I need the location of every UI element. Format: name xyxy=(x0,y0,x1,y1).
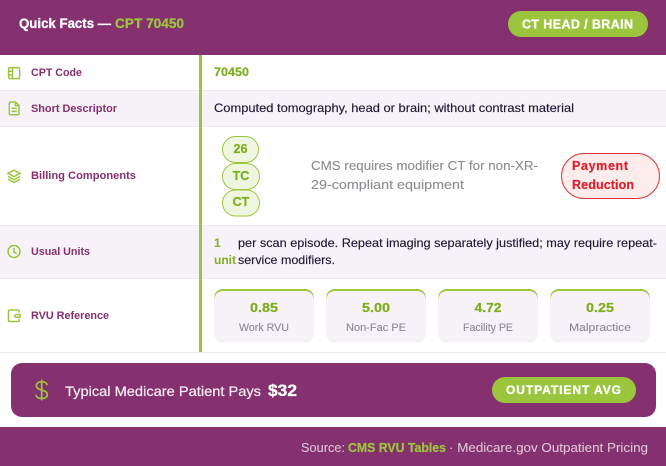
value: 70450: 70450 xyxy=(214,67,249,79)
header xyxy=(0,0,666,55)
icon: clock xyxy=(8,246,20,258)
row: short descriptor xyxy=(0,91,666,127)
banner: patient pays xyxy=(11,363,656,417)
source line: CMS RVU Tables xyxy=(348,441,446,455)
chip: TC xyxy=(222,164,260,190)
banner label: Typical Medicare Patient Pays xyxy=(65,383,261,399)
title: CPT 70450 xyxy=(115,15,184,31)
card: malpractice: 0.25 xyxy=(586,300,614,315)
label: RVU Reference: RVU Reference xyxy=(31,310,109,322)
value: 1 unit xyxy=(214,236,236,267)
label: Billing Components: Billing Components xyxy=(31,170,136,182)
title: Quick Facts — xyxy=(19,15,111,31)
chip: 26: 26 xyxy=(234,142,247,156)
badge: outpatient avg xyxy=(492,377,636,403)
badge: payment reduction: Reduction xyxy=(572,178,634,192)
row: CPT code xyxy=(0,55,666,91)
chip: CT: CT xyxy=(233,195,250,209)
modifier note: 29-compliant equipment xyxy=(311,178,465,192)
chip: TC: TC xyxy=(233,169,249,183)
card: work RVU xyxy=(214,289,314,342)
icon: code table xyxy=(9,68,20,79)
row: RVU reference xyxy=(0,279,666,353)
footer xyxy=(0,427,666,466)
value: 1 unit: unit xyxy=(214,253,236,267)
card: malpractice: Malpractice xyxy=(569,322,631,334)
card: work RVU: Work RVU xyxy=(239,322,289,334)
icon: document xyxy=(9,102,19,115)
row: billing components xyxy=(0,127,666,226)
card: non-facility PE xyxy=(326,289,426,342)
card: non-facility PE: 5.00 xyxy=(362,300,390,315)
units text xyxy=(238,236,657,267)
modifier note: CMS requires modifier CT for non-XR- xyxy=(311,159,538,173)
badge: outpatient avg: OUTPATIENT AVG xyxy=(506,383,621,397)
card: facility PE: Facility PE xyxy=(463,322,513,334)
chip: 26 xyxy=(222,136,258,162)
card: malpractice xyxy=(550,289,650,342)
badge: CT head / brain xyxy=(508,11,648,37)
title xyxy=(19,15,184,31)
banner amount: $32 xyxy=(268,381,297,400)
chip: CT xyxy=(222,190,260,216)
badge: payment reduction: Payment xyxy=(572,159,629,173)
descriptor text: Computed tomography, head or brain; without contrast material xyxy=(214,101,574,115)
source line: · Medicare.gov Outpatient Pricing xyxy=(449,441,648,455)
badge: payment reduction xyxy=(562,154,660,198)
icon: dollar xyxy=(36,380,47,400)
icon: wallet xyxy=(8,310,20,322)
card: work RVU: 0.85 xyxy=(250,300,278,315)
units text: service modifiers. xyxy=(238,253,335,267)
label: Usual Units: Usual Units xyxy=(31,246,90,258)
modifier note xyxy=(311,159,538,192)
card: facility PE: 4.72 xyxy=(474,300,502,315)
card: non-facility PE: Non-Fac PE xyxy=(346,322,406,334)
source line: Source: xyxy=(301,441,345,455)
units text: per scan episode. Repeat imaging separately justified; may require repeat- xyxy=(238,236,657,250)
label: Short Descriptor: Short Descriptor xyxy=(31,103,118,115)
badge: CT head / brain: CT HEAD / BRAIN xyxy=(522,17,633,31)
card: facility PE xyxy=(438,289,538,342)
value: 1 unit: 1 xyxy=(214,236,221,250)
icon: layers xyxy=(8,170,20,182)
source line xyxy=(301,441,648,455)
row: usual units xyxy=(0,226,666,279)
label: CPT Code: CPT Code xyxy=(31,67,82,79)
